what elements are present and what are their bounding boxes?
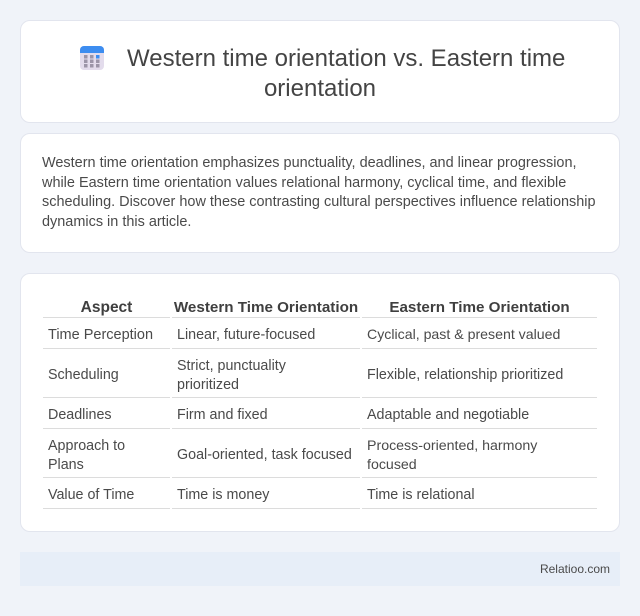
intro text: [42, 155, 596, 230]
table: Cyclical, past & present valued: [367, 326, 560, 342]
heading: orientation: [264, 75, 376, 102]
intro text: Western time orientation emphasizes punctuality, deadlines, and linear progression,: [42, 155, 577, 171]
table: Strict, punctuality: [177, 358, 286, 374]
heading: Western time orientation vs. Eastern time: [127, 45, 565, 72]
header: western: Western Time Orientation: [174, 299, 358, 316]
footer bar: [20, 552, 620, 586]
intro text: dynamics in this article.: [42, 214, 191, 230]
table: Firm and fixed: [177, 407, 268, 423]
row: scheduling: Scheduling: [48, 367, 119, 383]
row: approach to plans: [48, 438, 125, 473]
intro card: [20, 133, 620, 253]
title card: [20, 20, 620, 123]
intro text: scheduling. Discover how these contrasting cultural perspectives influence relationship: [42, 194, 596, 210]
comparison table card: [20, 273, 620, 532]
row: value of time: Value of Time: [48, 487, 134, 503]
table: focused: [367, 457, 417, 473]
icon: calendar: [80, 46, 104, 70]
row: time perception: Time Perception: [48, 327, 153, 343]
header: aspect: Aspect: [81, 299, 132, 316]
table: Time is relational: [367, 487, 475, 503]
footer text: Relatioo.com: [540, 562, 610, 576]
table: prioritized: [177, 377, 239, 393]
table: [43, 299, 597, 509]
heading: [127, 45, 565, 102]
table: Goal-oriented, task focused: [177, 447, 352, 463]
table: Flexible, relationship prioritized: [367, 367, 563, 383]
row: approach to plans: Plans: [48, 457, 84, 473]
intro text: while Eastern time orientation values relational harmony, cyclical time, and flexible: [42, 174, 566, 190]
table: Adaptable and negotiable: [367, 407, 529, 423]
header: eastern: Eastern Time Orientation: [389, 299, 570, 316]
table: Linear, future-focused: [177, 327, 315, 343]
row: deadlines: Deadlines: [48, 407, 112, 423]
table: Process-oriented, harmony: [367, 438, 537, 454]
row: approach to plans: Approach to: [48, 438, 125, 454]
table: Time is money: [177, 487, 269, 503]
